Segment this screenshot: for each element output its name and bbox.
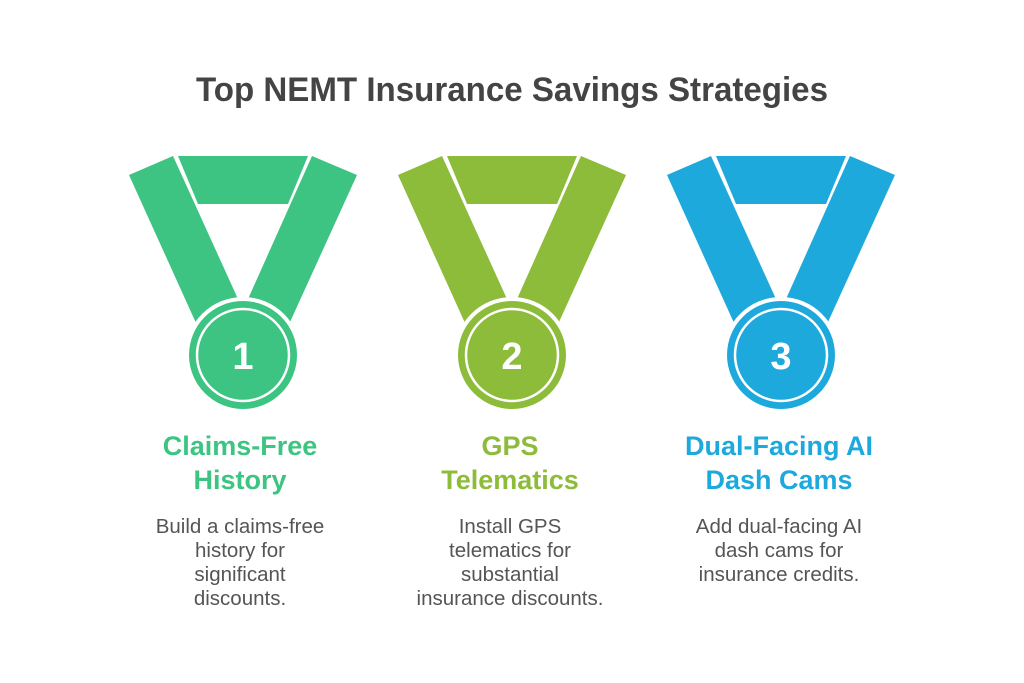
heading 3	[685, 431, 873, 495]
heading 2: Telematics	[441, 465, 579, 495]
heading 3: Dual-Facing AI	[685, 431, 873, 461]
text 3	[696, 515, 862, 586]
heading 1: Claims-Free	[163, 431, 317, 461]
medal 3	[667, 156, 895, 413]
heading 2: GPS	[481, 431, 539, 461]
text 1: significant	[194, 563, 286, 586]
medal 2: 2	[501, 336, 523, 378]
text 2: telematics for	[449, 539, 571, 562]
text 2: Install GPS	[459, 515, 561, 538]
text 1: history for	[195, 539, 285, 562]
text 3: Add dual-facing AI	[696, 515, 862, 538]
title: Top NEMT Insurance Savings Strategies	[196, 71, 828, 109]
heading 1	[163, 431, 317, 495]
medal 1: 1	[232, 336, 254, 378]
heading 2	[441, 431, 579, 495]
text 2	[417, 515, 603, 610]
text 2: insurance discounts.	[417, 587, 603, 610]
text 2: substantial	[461, 563, 559, 586]
heading 3: Dash Cams	[705, 465, 853, 495]
heading 1: History	[193, 465, 287, 495]
text 1: discounts.	[194, 587, 286, 610]
medal 2	[398, 156, 626, 413]
medal 1	[129, 156, 357, 413]
text 1	[156, 515, 324, 610]
medal 3: 3	[770, 336, 792, 378]
text 3: insurance credits.	[699, 563, 859, 586]
text 3: dash cams for	[715, 539, 844, 562]
text 1: Build a claims-free	[156, 515, 324, 538]
